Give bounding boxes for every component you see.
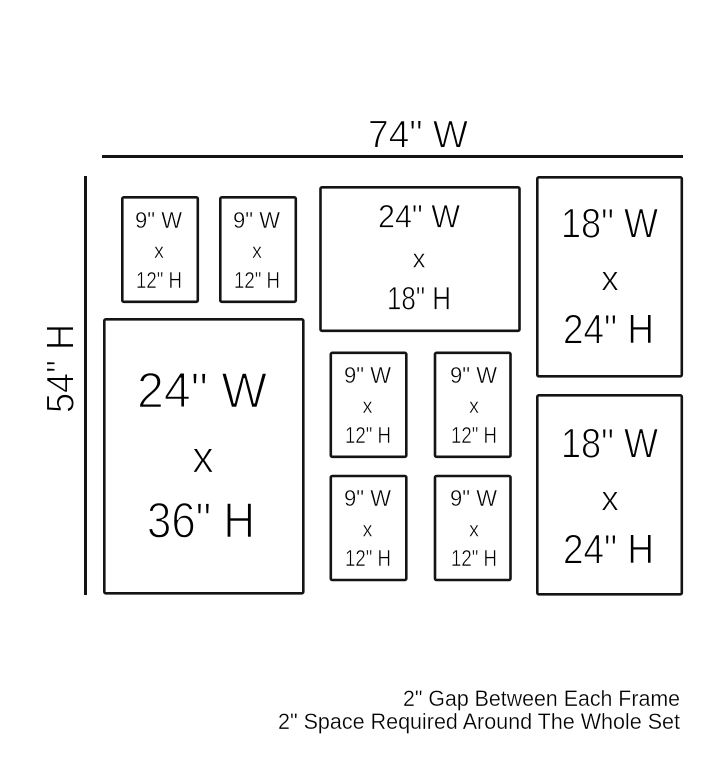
frame: medium portrait bottom right: x bbox=[601, 477, 619, 518]
frame: large portrait: x bbox=[192, 432, 214, 483]
frame: small center 2 bbox=[435, 353, 510, 457]
frame: small center 3: 9" W bbox=[344, 485, 392, 511]
frame: small top left 2 bbox=[220, 197, 296, 302]
height dimension line bbox=[84, 176, 87, 595]
frame: small top left 1: 9" W bbox=[135, 207, 183, 233]
frame: small center 3 bbox=[331, 476, 406, 580]
frame: medium landscape: 24" W bbox=[378, 198, 461, 234]
frame: medium landscape: x bbox=[412, 243, 426, 273]
frame: medium portrait top right bbox=[537, 177, 682, 376]
width dimension label: 74" W bbox=[368, 114, 468, 156]
frame: small top left 1 bbox=[122, 197, 198, 302]
frame: small top left 1: x bbox=[154, 239, 164, 263]
footnote text bbox=[278, 686, 680, 734]
frame: medium portrait bottom right: 18" W bbox=[561, 420, 658, 466]
frame: medium portrait bottom right: 24" H bbox=[563, 526, 654, 572]
frame: small center 4 bbox=[435, 476, 510, 580]
frame: medium portrait top right: 18" W bbox=[561, 200, 658, 246]
frame: small center 1: x bbox=[362, 394, 373, 418]
frame: small center 2: 9" W bbox=[450, 362, 498, 388]
footnote text: 2" Gap Between Each Frame bbox=[403, 686, 680, 711]
frame: medium landscape: 18" H bbox=[387, 280, 451, 316]
frame: small top left 2: 9" W bbox=[233, 207, 281, 233]
frame: medium portrait top right: x bbox=[601, 257, 619, 298]
frame: large portrait bbox=[104, 319, 303, 593]
frame: large portrait: 36" H bbox=[147, 493, 255, 549]
frame: small center 3: 12" H bbox=[345, 545, 391, 571]
frame: small top left 2: 12" H bbox=[234, 267, 280, 293]
height dimension label: 54" H bbox=[40, 324, 82, 413]
frame: large portrait: 24" W bbox=[137, 363, 268, 419]
frame: small center 1 bbox=[331, 353, 406, 457]
footnote text: 2" Space Required Around The Whole Set bbox=[278, 709, 680, 734]
width dimension line bbox=[102, 155, 683, 158]
frame: medium portrait top right: 24" H bbox=[563, 306, 654, 352]
frame: medium portrait bottom right bbox=[537, 395, 682, 594]
frame: small center 3: x bbox=[362, 518, 373, 542]
frame: small center 4: x bbox=[469, 518, 479, 542]
frame: small center 2: x bbox=[469, 394, 479, 418]
frame: small top left 2: x bbox=[252, 239, 262, 263]
frame: small center 2: 12" H bbox=[451, 422, 497, 448]
frame: medium landscape bbox=[320, 187, 520, 331]
frame: small center 1: 12" H bbox=[345, 422, 391, 448]
frame: small top left 1: 12" H bbox=[136, 267, 182, 293]
frame: small center 4: 12" H bbox=[451, 545, 497, 571]
frame: small center 4: 9" W bbox=[450, 485, 498, 511]
frame: small center 1: 9" W bbox=[344, 362, 392, 388]
